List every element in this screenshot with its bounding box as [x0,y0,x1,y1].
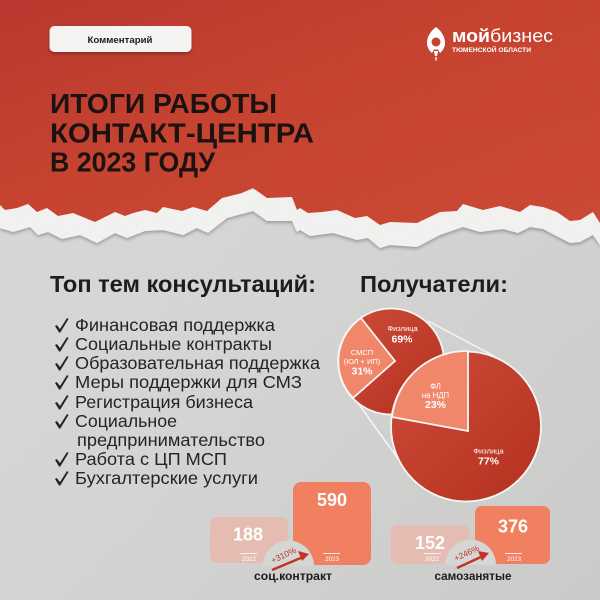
card 2023 [293,482,371,565]
logo: мой бизнес [427,26,553,60]
growth badge [445,540,496,568]
title [50,88,314,178]
checklist of topics: Регистрация бизнеса [75,392,253,412]
logo region: ТЮМЕНСКОЙ ОБЛАСТИ [452,45,531,54]
card 2023: 2023 [325,556,339,563]
checklist of topics: Социальное [75,411,177,431]
small pie labels [344,324,418,378]
title: В 2023 ГОДУ [50,146,216,178]
big pie labels [422,382,504,468]
checklist of topics: Финансовая поддержка [75,315,275,335]
comparison: самозанятые [391,506,550,583]
card 2023: 590 [317,490,347,510]
big pie: slice ФЛ на НДП 23% [392,351,468,431]
small pie labels: 31% [351,366,373,378]
small pie: slice Физлица 69% [338,308,444,414]
card 2022 [210,517,288,563]
heading: recipients: Получатели: [360,271,508,297]
big pie labels: Физлица [473,446,504,456]
card 2023 [475,506,550,564]
logo wordmark: мой [452,26,490,46]
checklist of topics: Работа с ЦП МСП [75,449,227,469]
checklist of topics: предпринимательство [77,430,265,450]
small pie: slice СМСП 31% [338,318,395,398]
big pie labels: 77% [478,456,500,468]
card 2022: 2022 [425,556,439,563]
card 2022: 188 [233,524,263,544]
big pie labels: ФЛ [430,382,441,391]
label: соц.контракт [254,571,332,583]
card 2023: 2023 [507,556,521,563]
big pie labels: 23% [425,399,447,411]
badge: Комментарий [50,26,192,52]
connector lines [355,321,494,460]
growth badge: +310% [269,545,298,565]
growth badge [263,540,314,570]
pie charts [338,308,541,502]
badge: Комментарий: Комментарий [88,35,153,46]
torn white paper strip [0,190,600,248]
card 2022: 152 [415,533,445,553]
title: ИТОГИ РАБОТЫ [50,88,277,119]
small pie labels: СМСП [351,348,373,357]
card 2023: 376 [498,516,528,536]
checklist of topics: Образовательная поддержка [75,353,320,373]
icon: rocket pin [427,27,445,60]
checklist of topics: Бухгалтерские услуги [75,468,258,488]
card 2022: 2022 [242,556,256,563]
growth badge: +246% [452,543,481,563]
title: КОНТАКТ-ЦЕНТРА [50,118,314,148]
checklist of topics: Социальные контракты [75,334,272,354]
small pie labels: (ЮЛ + ИП) [344,357,381,366]
big pie: slice Физлица 77% [391,352,541,502]
logo wordmark light: бизнес [490,26,553,46]
label: самозанятые [434,571,512,583]
big pie labels: на НДП [422,391,449,400]
checklist of topics [55,315,320,488]
small pie labels: Физлица [387,324,418,333]
card 2022 [391,525,469,564]
small pie labels: 69% [391,334,413,346]
comparison: соц.контракт [210,482,371,583]
checklist of topics: Меры поддержки для СМЗ [75,372,302,392]
heading: topics: Топ тем консультаций: [50,271,316,297]
red torn header [0,0,600,225]
